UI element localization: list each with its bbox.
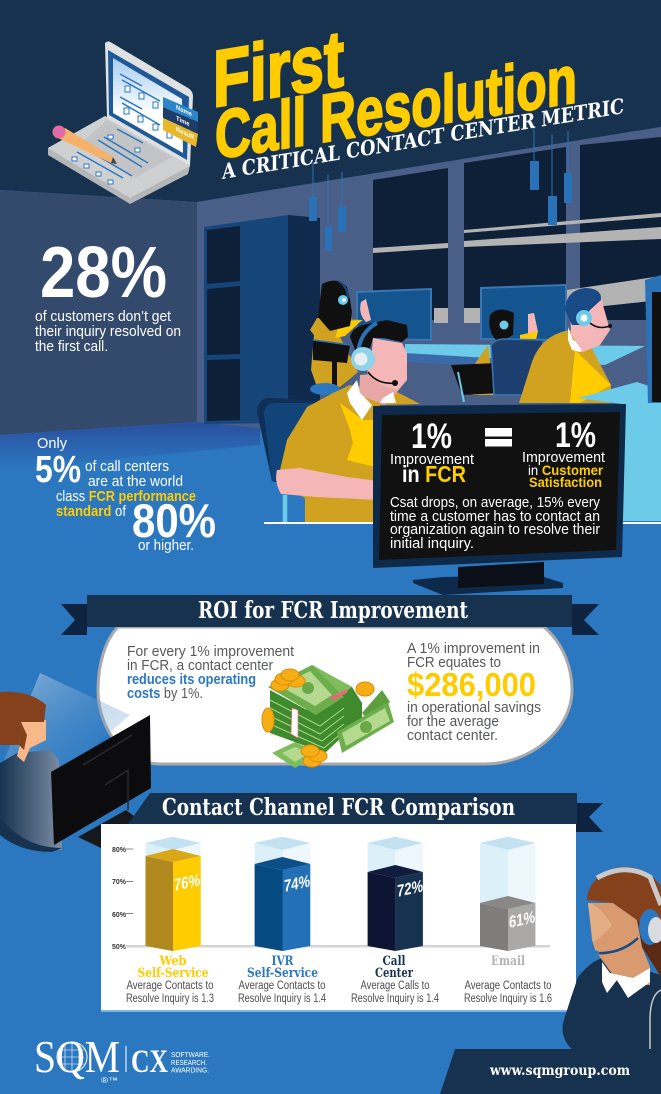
- logo: SQM CX: SOFTWARE.: [171, 1050, 210, 1059]
- label: Web Self-Service: Resolve Inquiry is 1.3: [126, 993, 214, 1005]
- agent: man at back centre: [473, 309, 538, 395]
- text: csat drops: initial inquiry.: [390, 536, 474, 552]
- text: 1% improvement in FCR: [390, 417, 474, 487]
- right foreground desk: [578, 382, 661, 521]
- label: Email: Resolve Inquiry is 1.6: [464, 993, 552, 1005]
- axis: 80%: [112, 847, 127, 854]
- back monitors: [356, 284, 567, 341]
- text: 1% improvement in customer satisfaction: Improvement: [522, 450, 605, 466]
- banner: ROI for FCR Improvement: ROI for FCR Improvement: [198, 597, 468, 624]
- back wall: [197, 127, 661, 430]
- text: csat drops: organization again to resolve their: [390, 522, 600, 538]
- cabinet: [204, 215, 320, 424]
- icon: money stack and coins: [262, 665, 394, 768]
- label: Call Center: Resolve Inquiry is 1.4: [351, 993, 439, 1005]
- bar: IVR Self-Service 74%: [255, 837, 310, 951]
- text: operating costs: costs by 1%.: [127, 686, 203, 702]
- text: operating costs: in FCR, a contact center: [127, 658, 273, 674]
- foreground monitor with FCR message: [373, 404, 626, 595]
- text: operational savings: in operational savings: [407, 700, 541, 716]
- ceiling: [0, 0, 661, 202]
- chairs at back: [451, 339, 544, 402]
- stat: 5% of call centers: Only: [37, 435, 67, 452]
- text: operational savings: FCR equates to: [407, 655, 501, 671]
- text: operational savings: A 1% improvement in: [407, 641, 540, 657]
- icon: laptop with survey form: Result: [176, 126, 195, 142]
- monitor at right edge: [645, 275, 661, 403]
- stat: 28%: [35, 233, 181, 355]
- stat: 5% of call centers: 5%: [35, 449, 81, 491]
- stat: 28%: their inquiry resolved on: [35, 323, 181, 340]
- agent: woman with headset at right: [562, 867, 661, 1052]
- label: Email: Average Contacts to: [464, 980, 552, 992]
- text: csat drops: [390, 495, 601, 552]
- panel: ROI pill: [98, 627, 572, 764]
- bar: IVR Self-Service 74%: 74%: [284, 870, 310, 896]
- website url: www.sqmgroup.com: [489, 1063, 630, 1079]
- agent: woman at back left: [310, 281, 371, 395]
- stat: 5% of call centers: class FCR performance: [56, 488, 196, 505]
- text: csat drops: time a customer has to contact an: [390, 509, 600, 525]
- equals sign: [485, 428, 512, 446]
- bar: Web Self-Service 76%: [146, 837, 201, 951]
- label: Email: Email: [491, 954, 525, 969]
- bar: Web Self-Service 76%: 76%: [174, 869, 200, 895]
- label: Web Self-Service: [126, 954, 214, 1005]
- stat: 5% of call centers: or higher.: [138, 537, 194, 554]
- label: Call Center: Center: [375, 966, 413, 981]
- text: operational savings: for the average: [407, 714, 499, 730]
- floor edge shading: [0, 422, 260, 470]
- stat: 28%: of customers don’t get: [35, 308, 172, 325]
- logo: SQM CX: AWARDING.: [171, 1066, 209, 1074]
- text: operating costs: [127, 644, 294, 702]
- bar: Call Center 72%: 72%: [397, 875, 423, 901]
- stat: 5% of call centers: 80%: [132, 494, 216, 547]
- text: operational savings: contact center.: [407, 728, 498, 744]
- label: Call Center: Call: [382, 954, 406, 969]
- text: 1% improvement in customer satisfaction: [522, 416, 605, 490]
- icon: laptop with survey form: Name: [176, 104, 192, 119]
- bar: Call Center 72%: [368, 837, 423, 951]
- label: Web Self-Service: Average Contacts to: [126, 980, 214, 992]
- agent chair: [257, 398, 315, 490]
- hanging lamps: [309, 127, 572, 251]
- title: First: [213, 14, 344, 125]
- banner: ROI for FCR Improvement: [61, 595, 599, 635]
- main agent with headset: [276, 320, 420, 522]
- label: IVR Self-Service: Resolve Inquiry is 1.4: [238, 993, 326, 1005]
- label: Call Center: [351, 954, 439, 1005]
- windows: [373, 137, 661, 323]
- logo: SQM CX: [34, 1031, 210, 1085]
- left wall: [0, 190, 197, 435]
- logo: SQM CX: SQM: [34, 1031, 120, 1082]
- text: csat drops: Csat drops, on average, 15% every: [390, 495, 601, 511]
- text: operational savings: [407, 641, 541, 744]
- label: Web Self-Service: Web: [159, 954, 186, 969]
- logo: SQM CX: CX: [131, 1044, 168, 1080]
- axis: 50%: [112, 944, 127, 951]
- stat: 5% of call centers: are at the world: [88, 473, 183, 490]
- logo: SQM CX: RESEARCH.: [171, 1058, 207, 1067]
- label: IVR Self-Service: IVR: [272, 954, 294, 969]
- back desk: [405, 344, 645, 372]
- label: IVR Self-Service: Average Contacts to: [238, 980, 326, 992]
- bar: Email 61%: 61%: [509, 906, 535, 932]
- agent: man at back right: [519, 288, 612, 403]
- axis: 60%: [112, 912, 127, 919]
- text: 1% improvement in FCR: in FCR: [402, 461, 466, 487]
- text: 1% improvement in customer satisfaction: in Customer: [528, 462, 604, 478]
- logo: SQM CX: ®™: [101, 1076, 118, 1085]
- axis: [112, 847, 550, 951]
- label: Call Center: Average Calls to: [360, 980, 430, 992]
- icon: laptop with survey form: Time: [176, 115, 190, 128]
- text: 1% improvement in customer satisfaction: 1%: [555, 416, 596, 455]
- stat: 28%: 28%: [40, 233, 167, 313]
- stat: 5% of call centers: [35, 435, 216, 554]
- text: 1% improvement in customer satisfaction: Satisfaction: [529, 474, 602, 490]
- text: 1% improvement in FCR: 1%: [411, 417, 452, 456]
- stat: 28%: the first call.: [35, 338, 108, 355]
- text: operational savings: $286,000: [407, 666, 536, 703]
- label: Email: [464, 954, 552, 1005]
- stat: 5% of call centers: of call centers: [85, 458, 169, 475]
- panel: channel comparison chart: [101, 824, 576, 1012]
- text: operating costs: For every 1% improvement: [127, 644, 294, 660]
- banner: Contact Channel FCR Comparison: Contact Channel FCR Comparison: [162, 794, 515, 821]
- label: IVR Self-Service: Self-Service: [247, 966, 318, 981]
- text: operating costs: reduces its operating: [127, 672, 256, 688]
- label: IVR Self-Service: [238, 954, 326, 1005]
- banner: Contact Channel FCR Comparison: [128, 793, 603, 832]
- bar: Email 61%: [480, 837, 535, 951]
- axis: 70%: [112, 879, 127, 886]
- desk edge: [264, 522, 661, 524]
- icon: laptop with survey form: [48, 42, 198, 204]
- text: 1% improvement in FCR: Improvement: [390, 452, 474, 468]
- agent: woman at left monitor: [0, 673, 151, 852]
- stat: 5% of call centers: standard of: [56, 503, 127, 520]
- footer band: [440, 1049, 661, 1094]
- label: Web Self-Service: Self-Service: [138, 966, 208, 981]
